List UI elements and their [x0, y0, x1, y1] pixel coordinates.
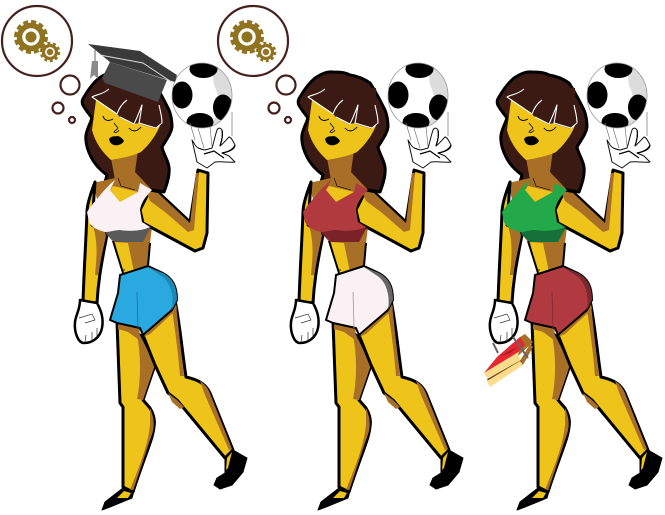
figure 3: green top, red shorts, holding cake: [497, 60, 662, 510]
glove holding cake: [490, 300, 518, 343]
figure 2: red top and white shorts: [291, 60, 463, 510]
white top: [87, 180, 152, 242]
green top: [502, 180, 567, 242]
thought bubble: gears, figure 2: [218, 6, 296, 123]
blue shorts: [110, 266, 177, 335]
red top: [303, 180, 368, 242]
cake slice in basket: [484, 334, 533, 387]
red shorts: [525, 266, 592, 335]
graduation cap: [88, 44, 177, 102]
white shorts: [326, 266, 393, 335]
thought bubble: gears, figure 1: [2, 6, 80, 123]
figure 1: graduate in white top and blue shorts: [75, 44, 247, 510]
